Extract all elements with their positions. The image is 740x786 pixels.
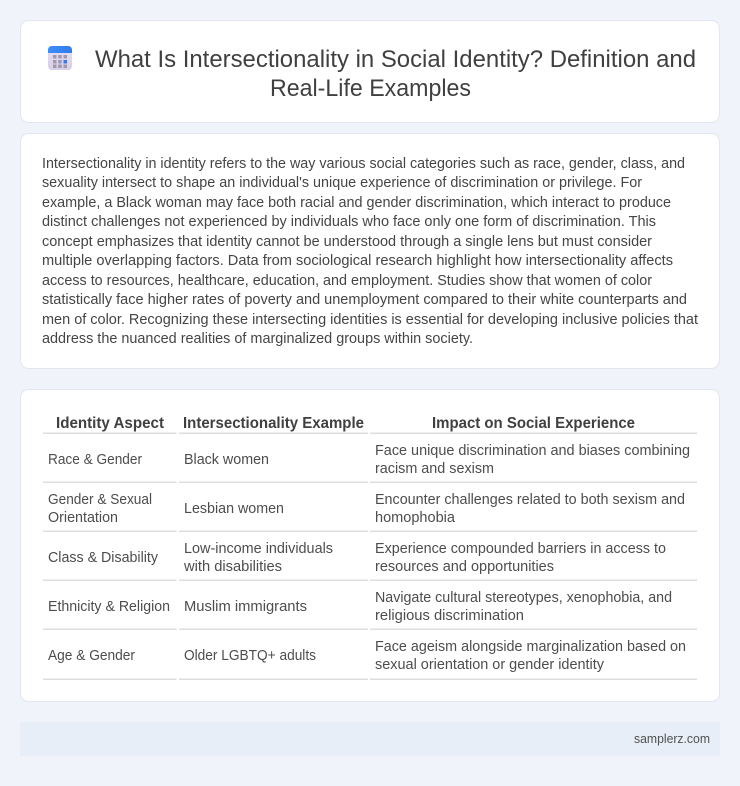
text block: definition paragraph: sexuality intersect to shape an individual's unique experience of discrimination or privilege. For xyxy=(42,175,642,191)
table header row: Intersectionality Example xyxy=(183,415,364,432)
table row: gender and sexual orientation xyxy=(48,492,685,526)
title xyxy=(95,46,696,102)
table row: ethnicity and religion: Ethnicity & Religion xyxy=(48,599,170,615)
text block: definition paragraph: statistically face higher rates of poverty and unemployment compared to their white counterparts and xyxy=(42,292,687,308)
table row: race and gender xyxy=(48,443,690,477)
table row: gender and sexual orientation: Gender & Sexual xyxy=(48,492,152,508)
table row: class and disability: with disabilities xyxy=(183,559,282,575)
table row: age and gender: Face ageism alongside marginalization based on xyxy=(375,639,686,655)
table row: ethnicity and religion xyxy=(48,590,672,624)
table row: class and disability: resources and opportunities xyxy=(375,559,554,575)
table row: age and gender xyxy=(48,639,686,673)
text block: definition paragraph: access to resources, healthcare, education, and employment. Studies show that women of color xyxy=(42,273,652,289)
table row: gender and sexual orientation: Encounter challenges related to both sexism and xyxy=(375,492,685,508)
text block: definition paragraph: address the nuanced realities of marginalized groups within society. xyxy=(42,331,473,347)
table row: class and disability: Class & Disability xyxy=(48,550,159,566)
table row: class and disability xyxy=(48,541,666,575)
table row: race and gender: racism and sexism xyxy=(375,461,494,477)
text block: definition paragraph: men of color. Recognizing these intersecting identities is essential for developing inclusive policies that xyxy=(42,312,698,328)
table row: race and gender: Face unique discrimination and biases combining xyxy=(375,443,690,459)
table row: age and gender: Age & Gender xyxy=(48,648,135,664)
table row: age and gender: Older LGBTQ+ adults xyxy=(184,648,316,664)
table row: race and gender: Black women xyxy=(184,452,269,468)
icon: calendar xyxy=(48,46,72,70)
text block: definition paragraph: Intersectionality in identity refers to the way various social categories such as race, gender, class, and xyxy=(42,156,685,172)
table row: race and gender: Race & Gender xyxy=(48,452,142,468)
table row: class and disability: Experience compounded barriers in access to xyxy=(375,541,666,557)
table row: ethnicity and religion: religious discrimination xyxy=(375,608,524,624)
table row: gender and sexual orientation: Lesbian women xyxy=(184,501,284,517)
footer source text: samplerz.com xyxy=(634,732,710,746)
title: What Is Intersectionality in Social Identity? Definition and xyxy=(95,46,696,73)
panel: description card xyxy=(20,134,720,368)
text block: definition paragraph: distinct challenges not experienced by individuals who face only one form of discrimination. This xyxy=(42,214,656,230)
table header row xyxy=(56,415,635,432)
text block: definition paragraph: multiple overlapping factors. Data from sociological research highlight how intersectionality affects xyxy=(42,253,673,269)
table row: gender and sexual orientation: homophobia xyxy=(375,510,455,526)
table row: class and disability: Low-income individuals xyxy=(184,541,333,557)
text block: definition paragraph xyxy=(42,156,698,347)
table row: ethnicity and religion: Navigate cultural stereotypes, xenophobia, and xyxy=(375,590,672,606)
text block: definition paragraph: example, a Black woman may face both racial and gender discrimination, which interact to produce xyxy=(42,195,671,211)
footer bar xyxy=(20,722,720,756)
table row: ethnicity and religion: Muslim immigrants xyxy=(184,599,307,615)
title: Real-Life Examples xyxy=(270,75,471,102)
table header row: Impact on Social Experience xyxy=(432,415,635,432)
panel: table card xyxy=(20,390,720,702)
table header row: Identity Aspect xyxy=(56,415,165,432)
table row: gender and sexual orientation: Orientation xyxy=(48,510,118,526)
panel: title card xyxy=(20,20,720,122)
text block: definition paragraph: concept emphasizes that identity cannot be understood through a single lens but must consider xyxy=(42,234,652,250)
table row: age and gender: sexual orientation or gender identity xyxy=(375,657,605,673)
